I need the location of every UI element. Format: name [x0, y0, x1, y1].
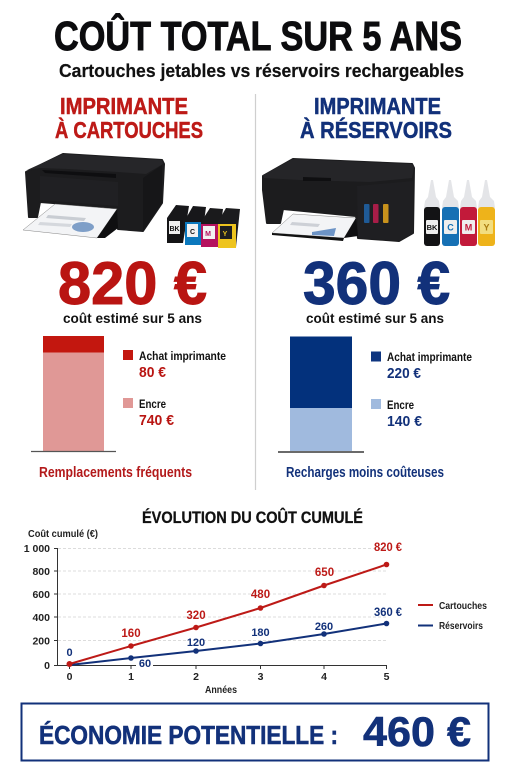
stacked bar: cartridge: [31, 336, 116, 452]
data labels: cartouches: 650: [315, 567, 334, 579]
legend: tank: [371, 352, 472, 430]
data labels: cartouches: 480: [251, 589, 270, 601]
panel: tank printer: [263, 93, 495, 481]
line: reservoirs: [70, 621, 389, 665]
price: tank: 360 €: [303, 250, 450, 317]
bottle BK: BK: [427, 223, 438, 232]
legend: tank: 220 €: [387, 365, 422, 382]
callout: potential savings: 460 €: [363, 708, 471, 755]
cartridge C: C: [190, 229, 195, 236]
heading: cartridge printer: IMPRIMANTE: [60, 93, 188, 119]
heading: tank printer: À RÉSERVOIRS: [300, 116, 452, 143]
x axis labels: 5: [384, 671, 390, 683]
cartridge Y: Y: [223, 231, 228, 238]
legend: cartridge: Encre: [139, 399, 166, 411]
chart legend: [418, 601, 487, 632]
y axis labels: 800: [32, 566, 50, 578]
heading: tank printer: IMPRIMANTE: [314, 93, 441, 119]
y axis labels: 600: [32, 589, 50, 601]
cartridge M: M: [205, 231, 211, 238]
x axis labels: 0: [67, 671, 73, 683]
caption: tank: coût estimé sur 5 ans: [306, 310, 444, 326]
heading: cartridge printer: [55, 93, 203, 143]
subtitle: Cartouches jetables vs réservoirs rechargeables: [59, 61, 464, 81]
data labels: cartouches: 320: [186, 610, 206, 622]
stacked bar: tank: [278, 336, 364, 452]
data labels: reservoirs: 60: [139, 658, 151, 670]
data labels: reservoirs: 360 €: [374, 607, 403, 619]
icon: tank printer: [263, 159, 414, 241]
data labels: reservoirs: 120: [187, 637, 205, 649]
line: cartouches: [66, 562, 389, 667]
legend: cartridge: Achat imprimante: [139, 351, 226, 363]
gridlines and axes: [54, 548, 387, 669]
heading: tank printer: [300, 93, 452, 143]
chart legend: Réservoirs: [439, 621, 483, 632]
data labels: reservoirs: [66, 607, 403, 670]
icon: ink cartridges: [167, 205, 240, 248]
icon: ink bottles: [424, 180, 495, 246]
legend: tank: Achat imprimante: [387, 352, 472, 364]
legend: cartridge: [123, 350, 226, 429]
bottle M: M: [465, 222, 472, 232]
bottle Y: Y: [483, 222, 490, 232]
x axis labels: [67, 671, 390, 683]
icon: cartridge printer: [23, 154, 164, 238]
x axis labels: 2: [193, 671, 199, 683]
note: cartridge: Remplacements fréquents: [39, 465, 192, 481]
callout: potential savings: ÉCONOMIE POTENTIELLE :: [39, 720, 338, 750]
y axis title: Coût cumulé (€): [28, 529, 98, 540]
legend: cartridge: 740 €: [139, 412, 175, 429]
x axis title: Années: [205, 685, 237, 696]
heading: cartridge printer: À CARTOUCHES: [55, 116, 203, 143]
data labels: cartouches: 160: [121, 628, 141, 640]
x axis labels: 3: [258, 671, 264, 683]
data labels: cartouches: 820 €: [374, 542, 403, 554]
caption: cartridge: coût estimé sur 5 ans: [63, 310, 202, 326]
data labels: cartouches: [121, 542, 403, 640]
callout: potential savings: [22, 704, 488, 760]
x axis labels: 1: [128, 671, 134, 683]
legend: tank: 140 €: [387, 413, 423, 430]
note: tank: Recharges moins coûteuses: [286, 465, 444, 481]
chart legend: Cartouches: [439, 601, 487, 612]
chart title: ÉVOLUTION DU COÛT CUMULÉ: [142, 508, 363, 527]
y axis labels: 1 000: [24, 543, 50, 555]
y axis labels: 0: [44, 660, 50, 672]
price: cartridge: 820 €: [58, 250, 207, 317]
bottle C: C: [447, 222, 454, 232]
y axis labels: 200: [32, 636, 50, 648]
y axis labels: [24, 543, 50, 672]
legend: cartridge: 80 €: [139, 364, 167, 381]
x axis labels: 4: [321, 671, 327, 683]
panel: cumulative cost chart: [24, 508, 487, 696]
panel: cartridge printer: [23, 93, 240, 481]
cartridge BK: BK: [169, 226, 180, 233]
data labels: reservoirs: 180: [251, 627, 270, 639]
data labels: reservoirs: 0: [66, 647, 73, 659]
data labels: reservoirs: 260: [315, 621, 333, 633]
y axis labels: 400: [32, 612, 50, 624]
legend: tank: Encre: [387, 400, 414, 412]
